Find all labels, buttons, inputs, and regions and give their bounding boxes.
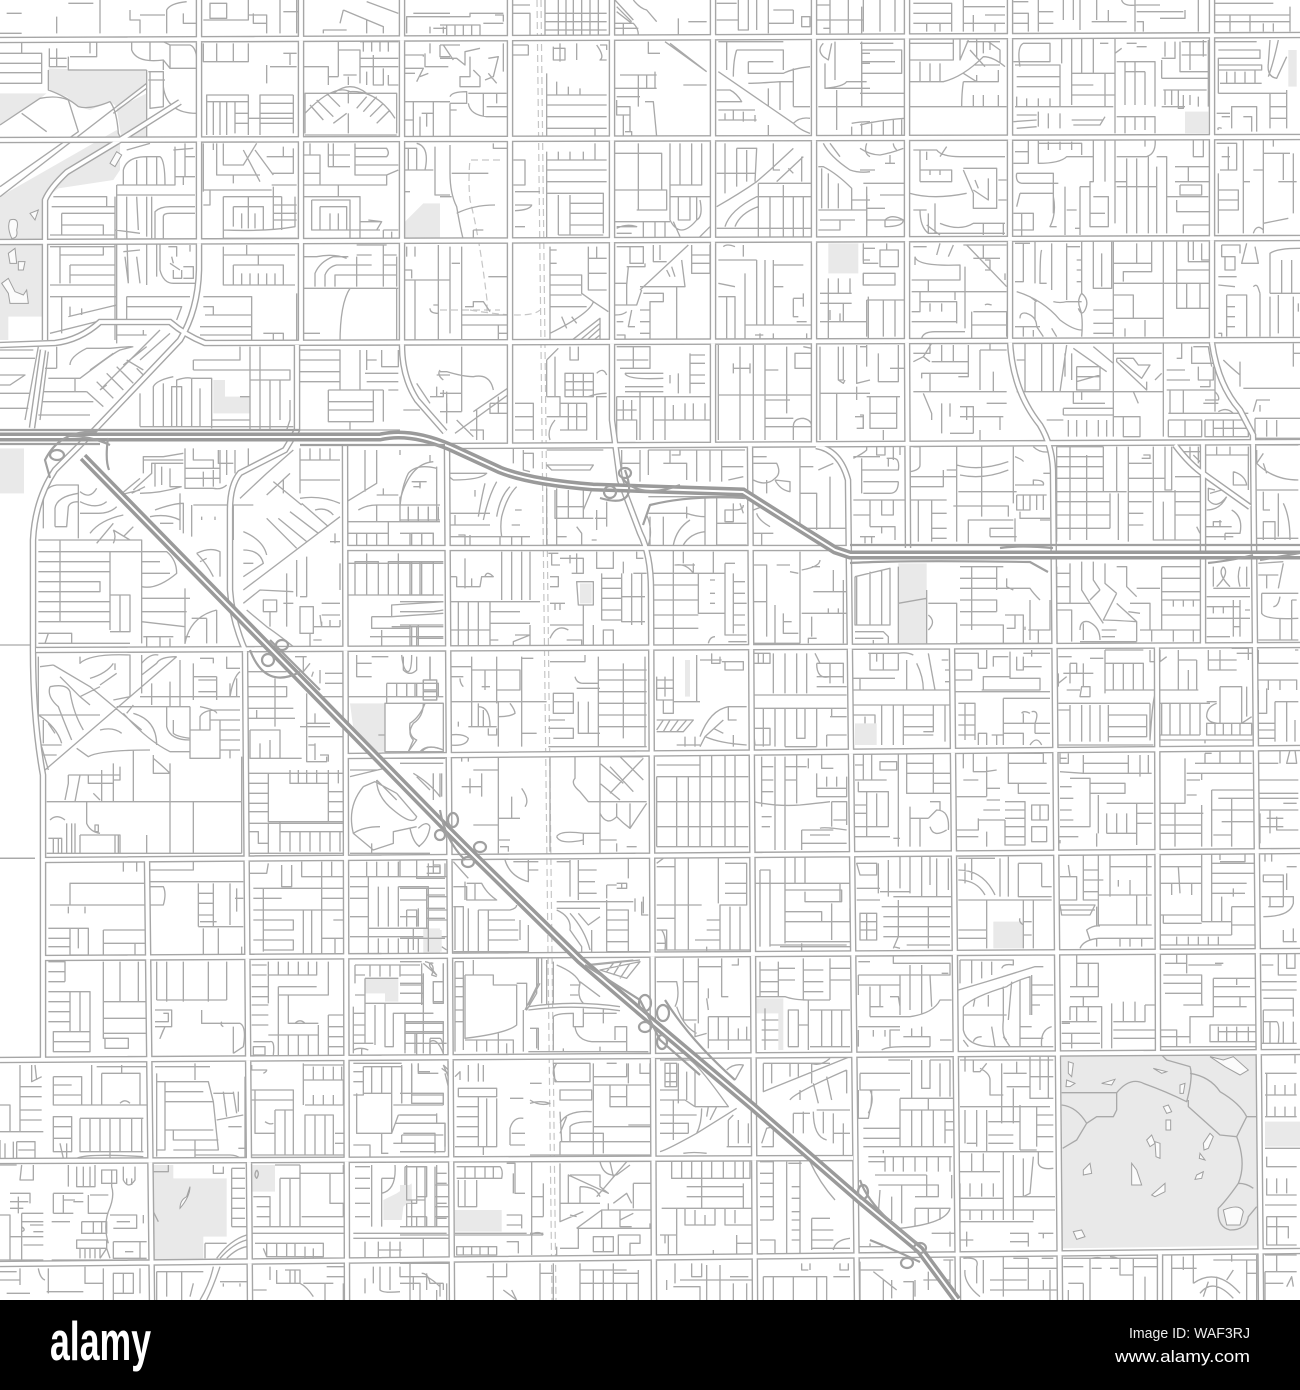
central streets (400, 448, 847, 853)
west central streets (0, 448, 445, 858)
southeast streets and large park (857, 850, 1300, 1300)
northeast streets (860, 0, 1300, 440)
canal dashed lines (440, 0, 556, 1300)
logo: alamy: alamy (50, 1310, 151, 1372)
east central streets (853, 445, 1298, 847)
southwest streets and park (0, 858, 448, 1300)
northwest streets and park (0, 0, 450, 430)
south central streets (400, 857, 850, 1300)
image id: Image ID: WAF3RJ (1129, 1325, 1250, 1342)
footer bar (0, 1300, 1300, 1390)
north central streets (440, 0, 870, 440)
website: www.alamy.com (1114, 1347, 1250, 1366)
freeway centre line (0, 435, 1300, 1300)
freeway ramps and interchanges (0, 430, 1300, 1268)
freeway band (0, 435, 1300, 1300)
